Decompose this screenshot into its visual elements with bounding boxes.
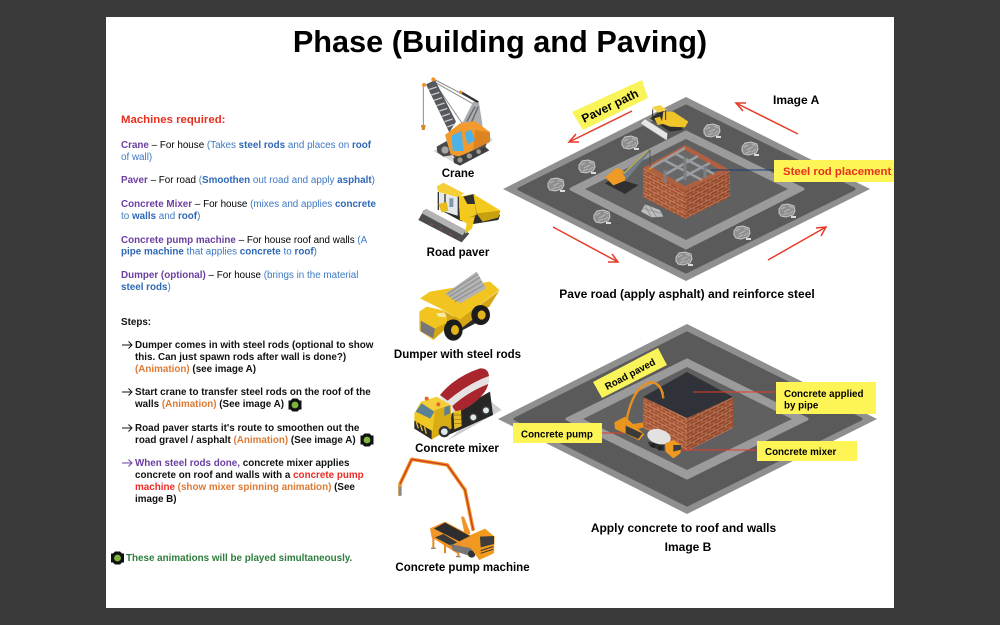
title: Phase (Building and Paving) [293, 24, 707, 59]
step 4: concrete pump [293, 470, 364, 481]
step 2: (Animation) (See image A) [162, 399, 284, 410]
caption: image B: Apply concrete to roof and walls [591, 521, 776, 535]
icon: gear note [111, 552, 124, 564]
crane description: Crane – For house (Takes steel rods and places on roof [121, 140, 371, 151]
brick wall [643, 145, 730, 219]
concrete pump description: pipe machine [121, 246, 184, 258]
arrow: top left paver path [569, 111, 632, 142]
steel rod stack [641, 204, 663, 217]
concrete mixer description: walls and roof) [132, 211, 200, 222]
callout: concrete mixer [681, 441, 857, 461]
callout: steel rod placement [711, 160, 894, 182]
step 1: this. Can just spawn rods after wall is done?) [135, 352, 346, 363]
heading: steps: Steps: [121, 317, 151, 328]
label: paver path [572, 80, 648, 130]
inner kerb [567, 360, 807, 478]
label: image A: Image A [773, 93, 820, 107]
icon: concrete pump machine [399, 459, 495, 560]
crane on lot [605, 149, 651, 194]
step 1: (see image A) [190, 364, 256, 375]
step 4: concrete on roof and walls with a [135, 470, 293, 481]
step 3: Road paver starts it's route to smoothen out the [135, 423, 360, 434]
icon: dumper with steel rods [419, 272, 499, 341]
concrete pump description: Concrete pump machine – For house roof and walls (A [121, 235, 367, 246]
callout: concrete applied by pipe: by pipe [784, 400, 819, 412]
concrete mixer description: Concrete Mixer – For house (mixes and applies concrete [121, 199, 376, 210]
crane description: of wall) [121, 152, 152, 163]
label: paver path: Paver path [579, 86, 641, 126]
callout: concrete applied by pipe: Concrete applied [784, 389, 863, 400]
scene: image A site [503, 97, 870, 281]
text block: machines required [121, 114, 377, 293]
icon: concrete mixer [414, 368, 502, 440]
step 4: machine [135, 482, 175, 493]
arrow: bottom left paver path [553, 227, 618, 262]
concrete mixer description: to [121, 211, 132, 222]
label: image B: Image B [665, 540, 712, 554]
arrow: top right paver path [736, 103, 798, 134]
dumper description: ) [168, 282, 171, 293]
concrete pump truck [614, 382, 664, 440]
step 1: (Animation) [135, 364, 190, 375]
road paver on road [640, 105, 688, 141]
heading: machines required: Machines required: [121, 114, 225, 126]
white document panel [106, 17, 894, 608]
caption: dumper with steel rods: Dumper with steel rods [394, 349, 521, 361]
dumper description: Dumper (optional) – For house (brings in the material [121, 270, 358, 281]
arrow: bottom right paver path [768, 227, 826, 260]
inner kerb [571, 132, 803, 248]
outer road edge [498, 324, 877, 514]
step 2: walls [134, 399, 162, 410]
callout: concrete pump: Concrete pump [521, 430, 593, 440]
step 1: Dumper comes in with steel rods (optional to show [135, 340, 374, 351]
road surface [515, 333, 861, 505]
step 4: image B) [135, 494, 177, 505]
inner lot [583, 367, 792, 470]
callout: concrete pump [513, 423, 624, 443]
road surface [519, 106, 854, 272]
step 4: (show mixer spinning animation) (See [178, 482, 355, 493]
step arrows [122, 342, 132, 466]
icon: gear step 2 [288, 398, 302, 412]
caption: crane: Crane [442, 168, 474, 180]
caption: concrete mixer: Concrete mixer [415, 443, 499, 455]
concrete pump description: that applies concrete to roof) [187, 246, 317, 258]
step 4: When steel rods done, concrete mixer applies [135, 458, 349, 469]
note text: These animations will be played simultaneously. [126, 553, 353, 564]
icon: road paver [418, 183, 501, 242]
gravel piles [548, 124, 796, 266]
caption: concrete pump machine: Concrete pump machine [395, 562, 530, 574]
label: road paved: Road paved [603, 357, 658, 393]
scene: image B site [498, 324, 877, 514]
icon: gear step 3 [360, 434, 374, 446]
caption: road paver: Road paver [427, 247, 490, 259]
concrete house [643, 372, 733, 451]
callout: concrete applied by pipe [693, 382, 876, 414]
callout: concrete mixer: Concrete mixer [765, 447, 837, 458]
dumper description: steel rods [121, 282, 168, 293]
concrete mixer truck [646, 426, 682, 458]
label: road paved [593, 348, 667, 398]
step 2: Start crane to transfer steel rods on the roof of the [135, 387, 371, 398]
step 3: (Animation) (See image A) [233, 435, 356, 446]
step 3: road gravel / asphalt [135, 435, 233, 446]
text block: steps [121, 317, 374, 505]
inner lot [585, 139, 788, 240]
paver description: Paver – For road (Smoothen out road and apply asphalt) [121, 175, 375, 186]
caption: image A: Pave road (apply asphalt) and reinforce steel [559, 287, 815, 301]
outer road edge [503, 97, 870, 281]
note: simultaneous animations [111, 552, 353, 564]
icon: crane [421, 77, 493, 166]
callout: steel rod placement: Steel rod placement [783, 166, 891, 178]
